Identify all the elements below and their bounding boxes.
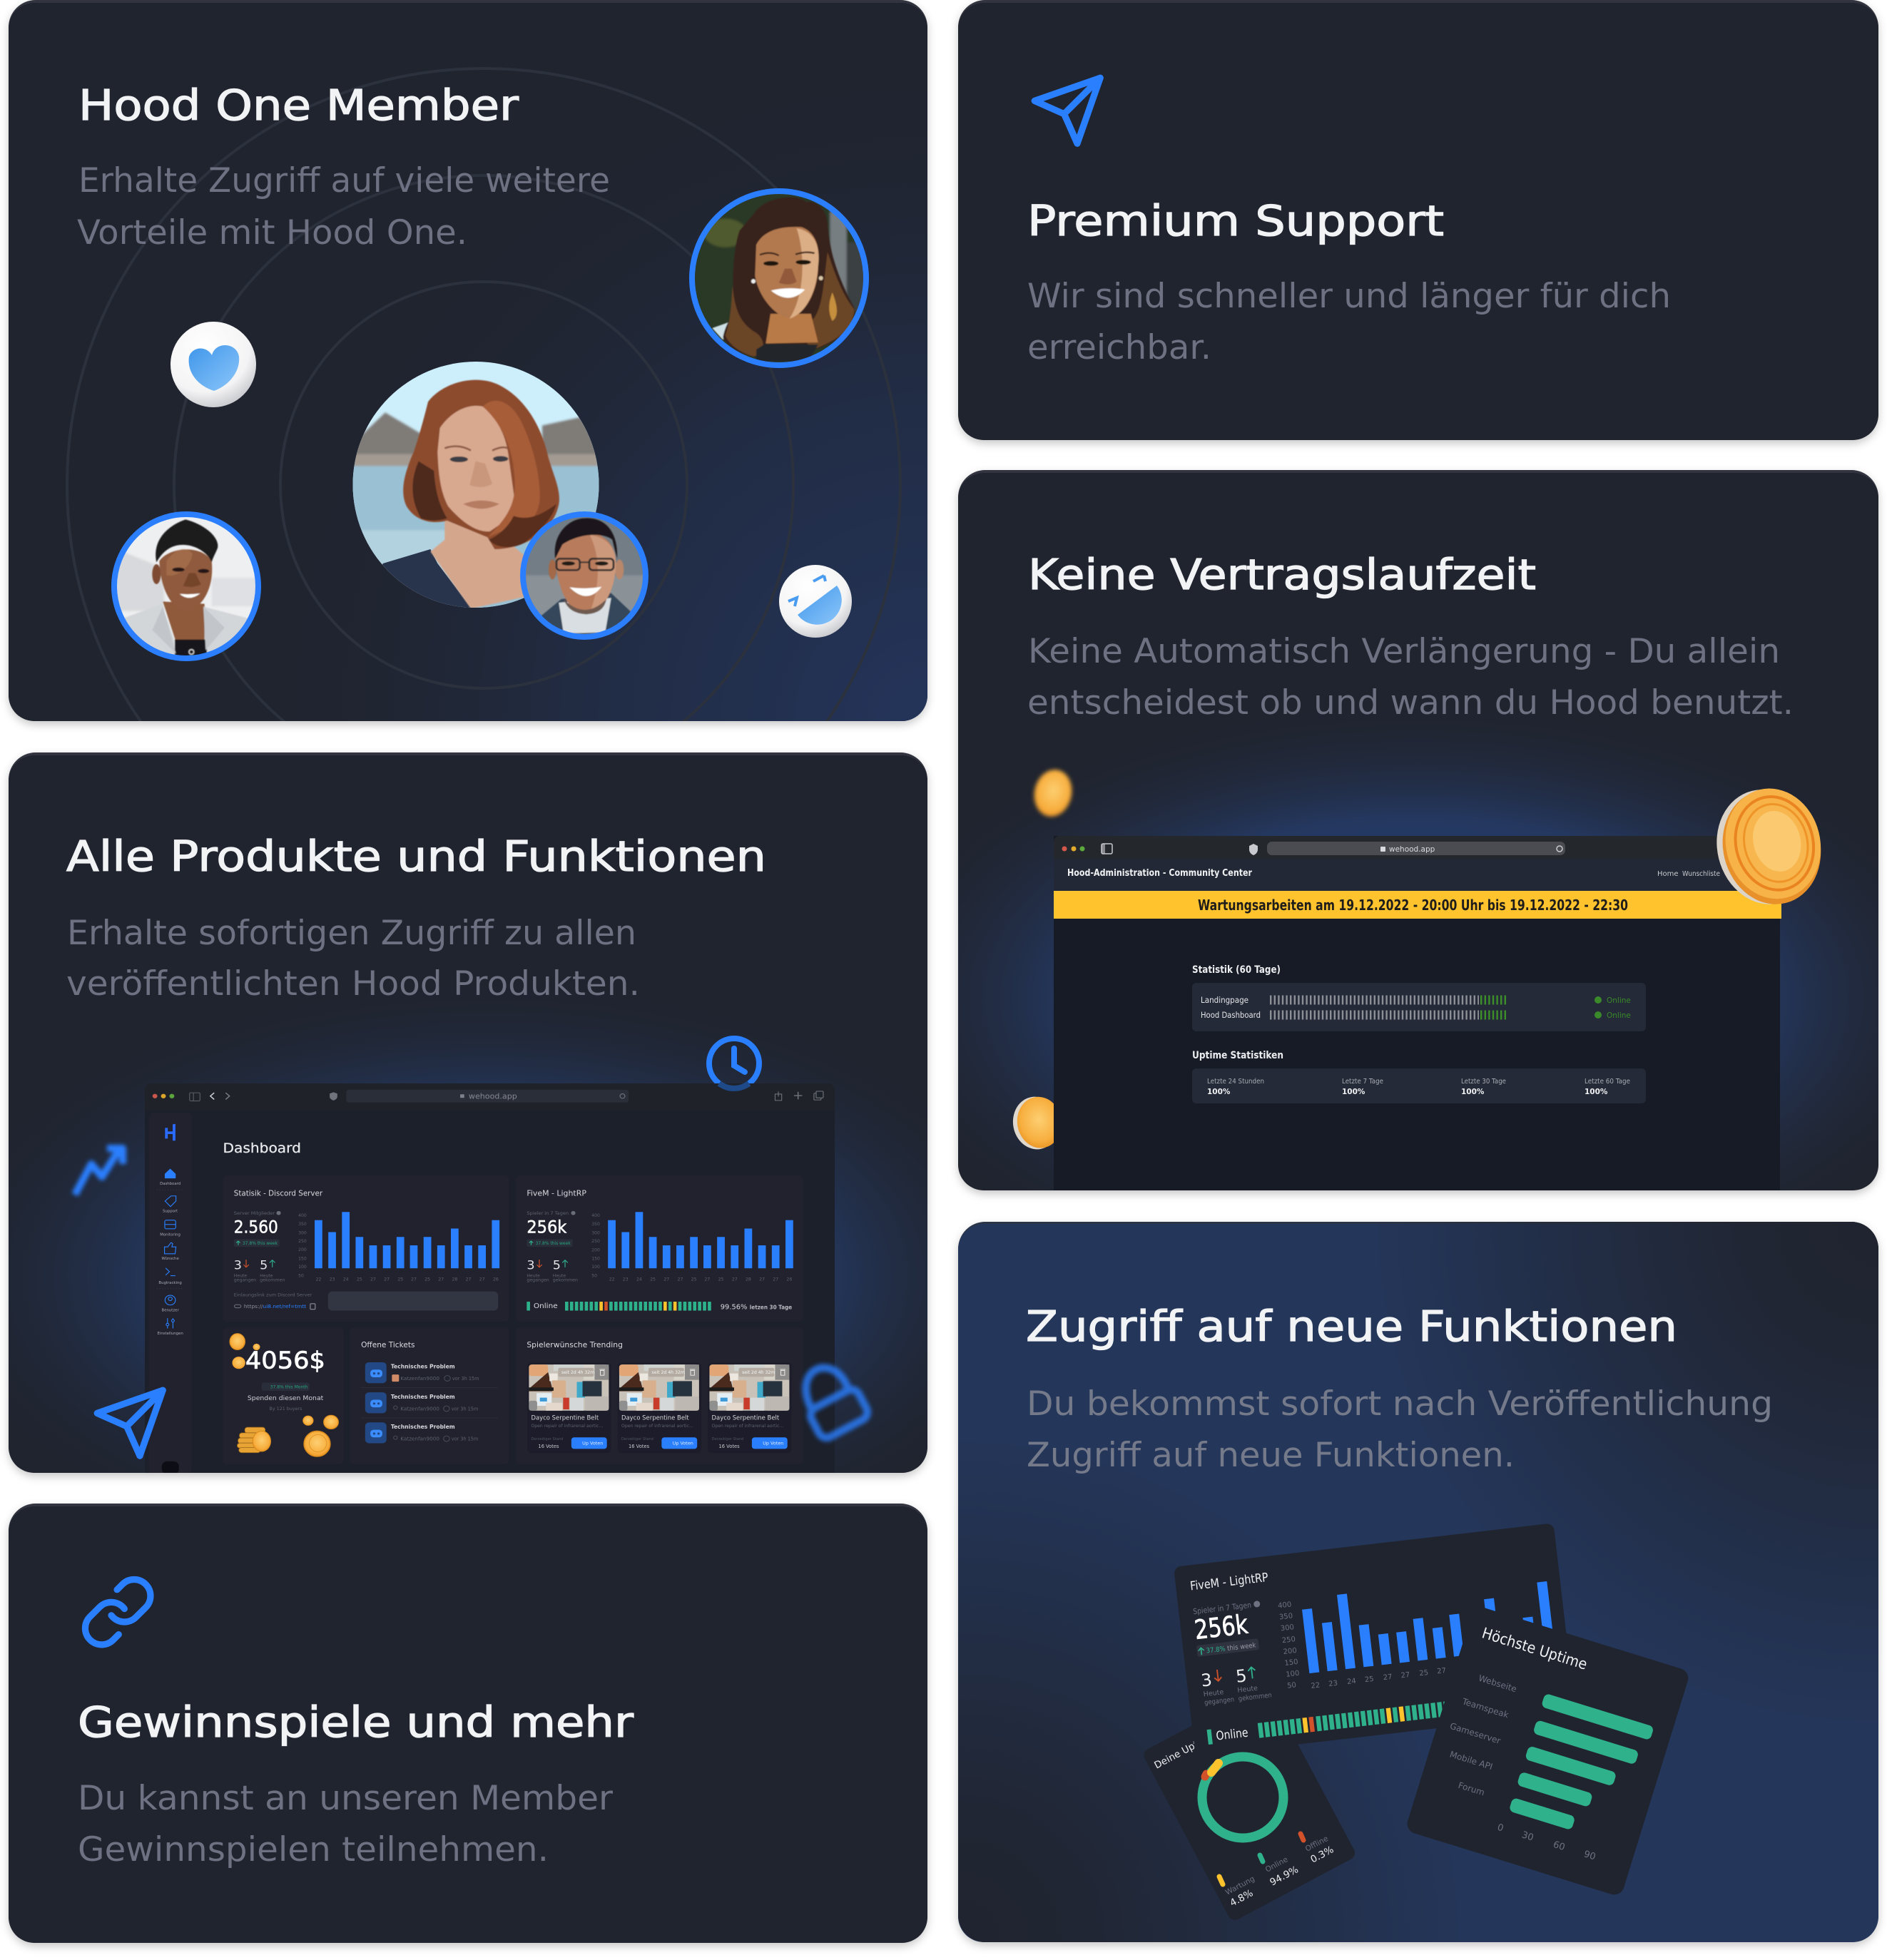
card: player wishes trending: Up Voten	[582, 1441, 603, 1446]
dashboard browser window	[145, 1083, 835, 1483]
card: FiveM statistics: letzen 30 Tage	[750, 1305, 792, 1311]
icon: paper plane	[1034, 78, 1100, 143]
chart card: Deine Uptime donut: Offline	[1304, 1834, 1330, 1854]
chart card: Höchste Uptime bars: Höchste Uptime	[1480, 1625, 1590, 1673]
card: FiveM statistics: 5	[553, 1259, 561, 1272]
uptime statistics: 100%	[1207, 1088, 1231, 1096]
decorative orbit rings	[66, 67, 902, 721]
chart card: Deine Uptime donut: 0.3%	[1308, 1844, 1336, 1866]
icon: chain link	[85, 1580, 151, 1645]
card: open tickets: vor 3h 15m	[452, 1406, 478, 1412]
chart card: FiveM LightRP bars: Heute	[1203, 1688, 1224, 1698]
maintenance banner	[1054, 891, 1781, 919]
chart card: Höchste Uptime bars: 30	[1520, 1829, 1535, 1844]
icon: clock lower arc dimmed	[719, 1083, 749, 1088]
chart card: FiveM LightRP bars: 350	[1279, 1612, 1293, 1621]
maintenance banner: Wartungsarbeiten am 19.12.2022 - 20:00 Uhr bis 19.12.2022 - 22:30	[1198, 897, 1628, 914]
card: FiveM statistics: Heute	[553, 1274, 566, 1278]
chart card: Höchste Uptime bars: Teamspeak	[1460, 1696, 1510, 1720]
card: player wishes trending: Derzeitiger Stand	[712, 1437, 743, 1441]
chart card: FiveM LightRP bars: 100	[1286, 1670, 1300, 1679]
icon: blurred padlock	[806, 1368, 870, 1441]
text block: new features description: Du bekommst sofort nach Veröffentlichung	[1027, 1384, 1773, 1424]
coin stack	[237, 1427, 265, 1453]
dashboard content left part: Einstellungen	[157, 1332, 183, 1336]
uptime statistics: Letzte 7 Tage	[1342, 1078, 1383, 1086]
card: FiveM statistics: 37.8% this week	[536, 1242, 571, 1246]
card: player wishes trending: Dayco Serpentine Belt	[712, 1415, 780, 1421]
portrait: man on central photo	[523, 514, 646, 637]
status statistics: Statistik (60 Tage)	[1192, 964, 1281, 976]
uptime statistics: Letzte 60 Tage	[1585, 1078, 1630, 1086]
chart card: FiveM LightRP bars: 256k	[1193, 1609, 1250, 1645]
card: FiveM statistics: 256k	[527, 1217, 567, 1237]
chart card: FiveM LightRP bars: gegangen	[1204, 1696, 1235, 1707]
card: donations: By 121 buyers	[270, 1406, 302, 1412]
heading: Alle Produkte und Funktionen: Alle Produkte und Funktionen	[66, 832, 766, 881]
uptime statistics: 100%	[1585, 1088, 1608, 1096]
card: player wishes trending: 16 Votes	[718, 1443, 740, 1449]
text block: raffle description: Gewinnspielen teilnehmen.	[78, 1830, 549, 1869]
uptime statistics: Letzte 30 Tage	[1461, 1078, 1506, 1086]
card: donations: 4056$	[245, 1347, 325, 1374]
icon: blurred trend arrow	[75, 1148, 123, 1195]
chart card: FiveM LightRP bars: 5	[1235, 1665, 1248, 1687]
chart card: Höchste Uptime bars: Forum	[1457, 1780, 1486, 1798]
icon: coin bottom left	[1009, 1093, 1066, 1153]
card: FiveM statistics	[516, 1175, 803, 1322]
card: FiveM statistics: gegangen	[527, 1279, 549, 1283]
chart card: Höchste Uptime bars: Gameserver	[1449, 1721, 1502, 1746]
card: donations	[229, 1333, 339, 1457]
uptime statistics: 100%	[1342, 1088, 1365, 1096]
background glow	[958, 473, 1878, 1190]
card: open tickets: Katzenfan9000	[400, 1375, 439, 1382]
text block: new features description: Zugriff auf neue Funktionen.	[1027, 1436, 1515, 1475]
card: open tickets: Technisches Problem	[391, 1424, 455, 1431]
panel: Premium Support	[958, 0, 1878, 440]
card: player wishes trending: Open repair of infrarenal aortic...	[621, 1423, 693, 1429]
chart card: FiveM LightRP bars: 27	[1400, 1671, 1410, 1680]
chart card: Höchste Uptime bars: Mobile API	[1448, 1749, 1494, 1772]
card: player wishes trending: Spielerwünsche Trending	[527, 1341, 623, 1349]
card: open tickets: Technisches Problem	[391, 1394, 455, 1401]
chart card: Höchste Uptime bars: 90	[1582, 1849, 1597, 1863]
panel: Zugriff auf neue Funktionen	[958, 1222, 1878, 1942]
card: player wishes trending: 16 Votes	[629, 1443, 649, 1449]
text block: support description: Wir sind schneller und länger für dich	[1027, 277, 1671, 316]
dashboard content left part	[149, 1090, 629, 1474]
card: player wishes trending: Dayco Serpentine Belt	[531, 1415, 599, 1421]
chart card: FiveM LightRP bars: 24	[1347, 1678, 1356, 1686]
card: Discord statistics: 2.560	[234, 1217, 278, 1237]
card: player wishes trending: 16 Votes	[538, 1443, 559, 1449]
status statistics: Landingpage	[1201, 995, 1248, 1005]
status statistics	[1192, 964, 1646, 1031]
dashboard content left part: Support	[163, 1210, 178, 1214]
chart card: FiveM LightRP bars: Heute	[1237, 1685, 1258, 1695]
card: FiveM statistics: gekommen	[553, 1279, 578, 1283]
card: player wishes trending: Dayco Serpentine Belt	[621, 1415, 689, 1421]
card: Discord statistics: gegangen	[234, 1279, 256, 1283]
uptime statistics: Letzte 24 Stunden	[1207, 1078, 1264, 1086]
chart card: Höchste Uptime bars: Webseite	[1477, 1673, 1518, 1694]
card: player wishes trending: Open repair of infrarenal aortic...	[712, 1423, 783, 1429]
card: Discord statistics: 37.8% this week	[243, 1242, 278, 1246]
card: FiveM statistics: Spieler in 7 Tagen	[527, 1210, 569, 1216]
chart card: FiveM LightRP bars: 37.8% this week	[1206, 1641, 1256, 1655]
card: Discord statistics: 3	[234, 1259, 242, 1272]
icon: laughing reaction ball	[779, 565, 852, 638]
chart card: FiveM LightRP bars: 200	[1283, 1647, 1297, 1656]
text block: support description: erreichbar.	[1027, 328, 1211, 367]
card: open tickets: Katzenfan9000	[400, 1436, 439, 1442]
text block: products description	[66, 914, 640, 1004]
card: open tickets: Technisches Problem	[391, 1364, 455, 1370]
status page browser window: Wunschliste	[1682, 870, 1720, 878]
card: donations: 37.8% this Month	[270, 1386, 308, 1389]
card: Discord statistics: Heute	[260, 1274, 273, 1278]
card: open tickets: Katzenfan9000	[400, 1406, 439, 1412]
status page browser window	[1054, 836, 1781, 1200]
chart card: Deine Uptime donut	[1141, 1686, 1357, 1922]
dashboard content right part	[516, 1091, 823, 1464]
card: Discord statistics: Einlaungslink zum Discord Server	[234, 1292, 312, 1297]
chart card: FiveM LightRP bars: 250	[1281, 1635, 1296, 1645]
heading: Premium Support: Premium Support	[1027, 196, 1444, 245]
card: open tickets	[350, 1327, 509, 1464]
icon: heart reaction ball	[171, 322, 256, 407]
chart card: Deine Uptime donut: Deine Uptime	[1152, 1730, 1216, 1772]
card: FiveM statistics: Online	[534, 1302, 558, 1310]
card: player wishes trending: Up Voten	[673, 1441, 693, 1446]
chart card: Deine Uptime donut: 4.8%	[1228, 1887, 1255, 1909]
chart card: FiveM LightRP bars: FiveM - LightRP	[1189, 1571, 1269, 1593]
chart card: Deine Uptime donut: Online	[1264, 1855, 1289, 1874]
portrait: central woman	[350, 359, 604, 613]
text block: raffle description: Du kannst an unseren Member	[78, 1779, 614, 1818]
card: open tickets: vor 3h 15m	[452, 1375, 479, 1382]
text block: Hood One description: Vorteile mit Hood One.	[77, 213, 467, 252]
text block: products description: Erhalte sofortigen Zugriff zu allen	[67, 914, 636, 953]
status page browser window: Home	[1657, 870, 1679, 878]
card: player wishes trending: Derzeitiger Stand	[621, 1437, 653, 1441]
panel: Keine Vertragslaufzeit	[958, 470, 1878, 1200]
card: player wishes trending: Open repair of infrarenal aortic...	[531, 1423, 603, 1429]
chart card: FiveM LightRP bars: 25	[1419, 1669, 1429, 1678]
uptime statistics: 100%	[1461, 1088, 1485, 1096]
uptime statistics: Uptime Statistiken	[1192, 1050, 1283, 1061]
chart card: FiveM LightRP bars: 27	[1383, 1673, 1393, 1682]
card: Discord statistics: Heute	[234, 1274, 248, 1278]
text block: Hood One description: Erhalte Zugriff auf viele weitere	[78, 161, 610, 200]
card: open tickets: vor 3h 15m	[452, 1436, 478, 1442]
card: Discord statistics: Server Mitglieder	[234, 1210, 275, 1216]
status statistics: Online	[1607, 996, 1631, 1005]
card: Discord statistics: Statisik - Discord Server	[234, 1189, 323, 1198]
icon: large gold coin	[1705, 777, 1833, 916]
chart card: FiveM LightRP bars: 3	[1200, 1670, 1213, 1691]
heading: Zugriff auf neue Funktionen: Zugriff auf neue Funktionen	[1026, 1302, 1677, 1351]
card: Discord statistics: 5	[260, 1259, 268, 1272]
card: open tickets: Offene Tickets	[361, 1341, 415, 1349]
card: Discord statistics	[234, 1190, 499, 1311]
heading: Keine Vertragslaufzeit: Keine Vertragslaufzeit	[1028, 550, 1536, 599]
card: FiveM statistics: 3	[527, 1259, 535, 1272]
uptime statistics	[1192, 1050, 1646, 1103]
chart card: Höchste Uptime bars: 0	[1496, 1822, 1505, 1834]
panel: Hood One Member	[4, 0, 932, 729]
chart card: FiveM LightRP bars: 300	[1280, 1623, 1295, 1633]
text block: new features description	[1027, 1384, 1773, 1475]
status statistics: Online	[1607, 1011, 1631, 1020]
text block: raffle description	[78, 1779, 614, 1869]
chart card: FiveM LightRP bars: 400	[1278, 1601, 1292, 1611]
chart card: Deine Uptime donut: Wartung	[1224, 1874, 1256, 1897]
site nav: Hood-Administration - Community Center	[1067, 867, 1252, 879]
chart card: Höchste Uptime bars	[1405, 1605, 1691, 1897]
status page browser window: wehood.app	[1389, 845, 1435, 854]
text block: products description: veröffentlichten Hood Produkten.	[66, 964, 640, 1004]
chart card: FiveM LightRP bars: Online	[1216, 1726, 1249, 1744]
status statistics: Hood Dashboard	[1201, 1010, 1261, 1020]
chart card: FiveM LightRP bars	[1174, 1523, 1575, 1756]
text block: contract description: Keine Automatisch Verlängerung - Du allein	[1028, 632, 1780, 671]
chart card: FiveM LightRP bars: 150	[1284, 1658, 1298, 1668]
panel: Alle Produkte und Funktionen	[9, 752, 927, 1483]
portrait: woman bottom left	[114, 514, 259, 658]
text block: support description	[1027, 277, 1671, 367]
chart card: Höchste Uptime bars: 60	[1552, 1839, 1566, 1853]
dashboard content left part: Monitoring	[160, 1233, 180, 1237]
chart card: FiveM LightRP bars: gekommen	[1238, 1691, 1272, 1703]
dashboard content left part: Dashboard	[223, 1140, 301, 1156]
card: donations: Spenden diesen Monat	[248, 1394, 324, 1402]
heading: Hood One Member: Hood One Member	[78, 81, 519, 130]
icon: clock behind window	[709, 1038, 759, 1088]
card: player wishes trending: Derzeitiger Stand	[531, 1437, 563, 1441]
card: FiveM statistics: FiveM - LightRP	[527, 1189, 586, 1198]
dashboard content left part: wehood.app	[469, 1092, 517, 1101]
chart card: FiveM LightRP bars: 50	[1287, 1681, 1297, 1690]
text block: contract description: entscheidest ob und wann du Hood benutzt.	[1027, 683, 1794, 723]
text block: Hood One description	[77, 161, 610, 252]
chart card: FiveM LightRP bars: 27	[1437, 1667, 1447, 1675]
chart card: Deine Uptime donut: 94.9%	[1268, 1864, 1301, 1889]
chart card: FiveM LightRP bars: 22	[1311, 1682, 1321, 1690]
dashboard content left part: Bugtracking	[158, 1281, 182, 1285]
card: player wishes trending	[516, 1327, 803, 1464]
chart card: FiveM LightRP bars: 25	[1364, 1675, 1374, 1684]
card: FiveM statistics: Heute	[527, 1274, 540, 1278]
dashboard content left part: Wünsche	[161, 1257, 179, 1261]
portrait: woman top right	[692, 191, 866, 366]
background glow	[20, 1031, 927, 1444]
chart card: FiveM LightRP bars: Spieler in 7 Tagen	[1193, 1601, 1252, 1616]
dashboard content left part: Benutzer	[162, 1309, 180, 1312]
panel: Gewinnspiele und mehr	[9, 1504, 927, 1943]
text block: contract description	[1027, 632, 1794, 723]
card: Discord statistics: https://ui8.net/ref=tmtt	[244, 1303, 306, 1310]
icon: blurred coin top left	[1030, 766, 1076, 820]
card: Discord statistics: gekommen	[260, 1279, 285, 1283]
dashboard content left part: Dashboard	[160, 1182, 180, 1186]
heading: Gewinnspiele und mehr: Gewinnspiele und mehr	[78, 1698, 634, 1747]
card: FiveM statistics: 99.56%	[721, 1303, 747, 1312]
chart card: FiveM LightRP bars: 23	[1328, 1680, 1338, 1688]
icon: paper plane	[97, 1390, 163, 1456]
card: player wishes trending: Up Voten	[763, 1441, 783, 1446]
